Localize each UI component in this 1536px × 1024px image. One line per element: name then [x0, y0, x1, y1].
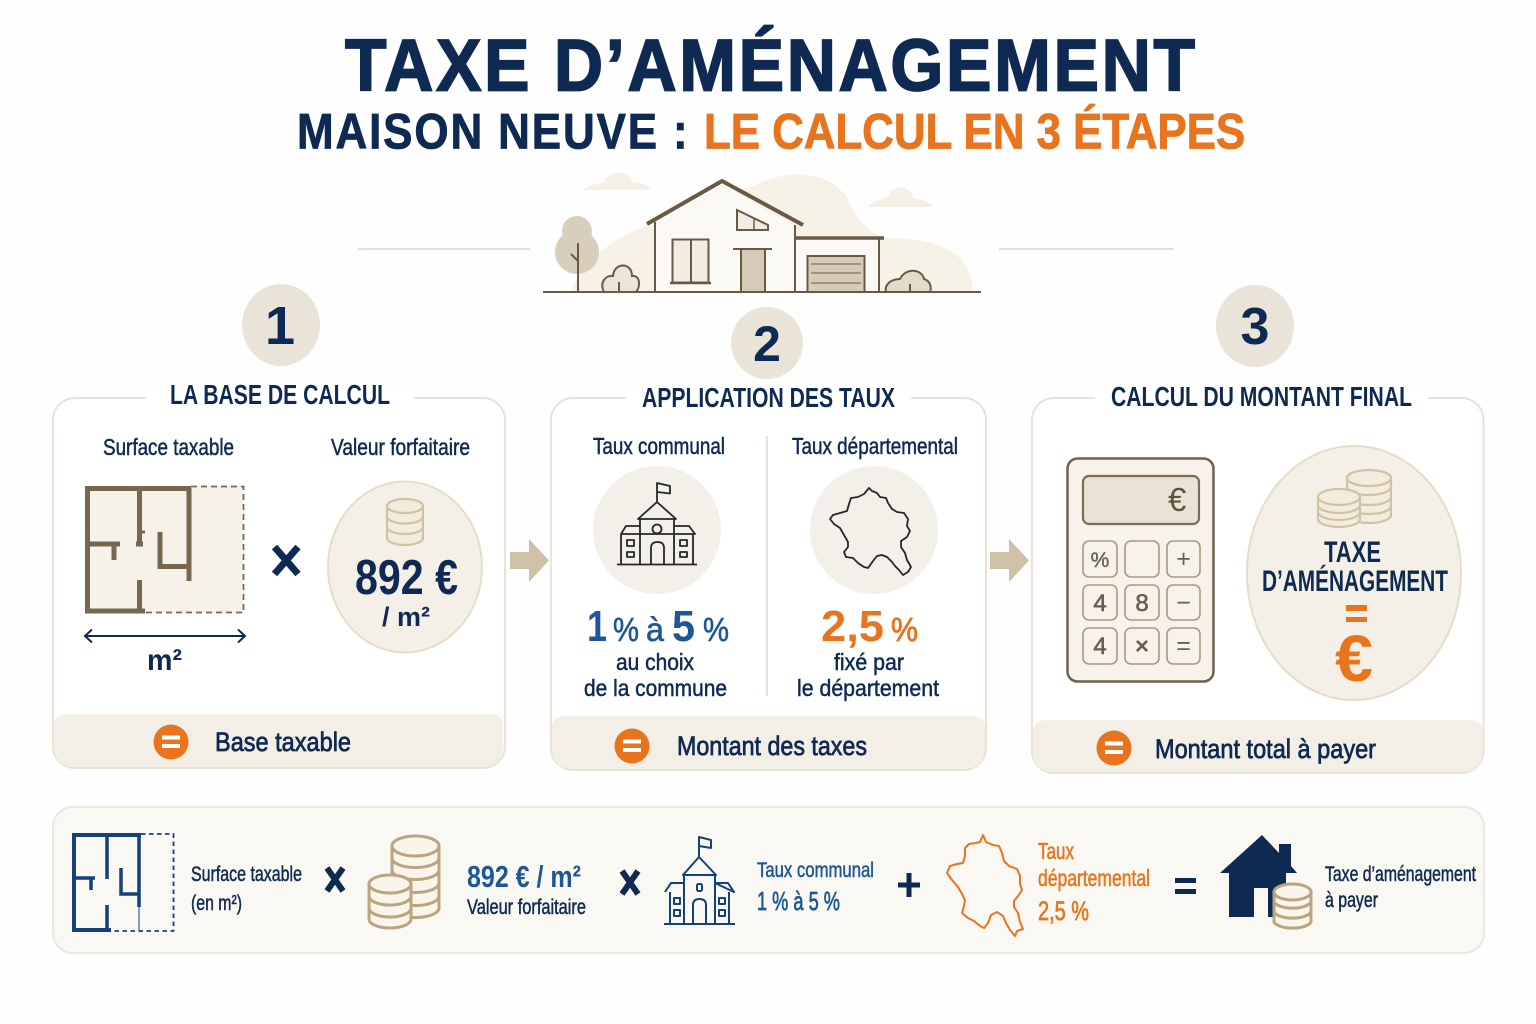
rate: 1 % à 5 %: à [646, 611, 665, 648]
icon: calculator: % [1091, 549, 1109, 572]
multiply sign [274, 547, 298, 574]
result circle: taxe d'aménagement = € [1247, 446, 1461, 700]
step 2 number badge: 2 [753, 316, 781, 372]
heading: APPLICATION DES TAUX [642, 382, 895, 413]
footer band: base taxable [54, 714, 503, 767]
step 3 number badge [1216, 285, 1294, 367]
value circle: 892 € / m²: / m² [382, 602, 430, 632]
panel: summary formula [53, 807, 1484, 953]
icon: floor plan [85, 486, 244, 613]
arrow: step 1 to step 2 [510, 539, 549, 582]
text: au choix de la commune [584, 649, 727, 701]
icon: calculator: × [1135, 633, 1149, 660]
icon: town hall [593, 466, 721, 594]
text: taux départemental 2,5 % [1038, 838, 1150, 926]
rate: 1 % à 5 %: 1 [587, 602, 607, 651]
arrow: step 2 to step 3 [990, 539, 1029, 582]
arrow: width dimension [85, 630, 245, 642]
subtitle [297, 103, 1245, 159]
multiply sign [327, 868, 343, 891]
rate: 1 % à 5 % [587, 602, 729, 651]
footer band: montant des taxes [552, 716, 985, 769]
text: fixé par le département: le département [797, 675, 940, 701]
text: 892 € / m² valeur forfaitaire [467, 859, 586, 919]
icon: floor plan blue [74, 834, 174, 931]
text: taux départemental 2,5 %: départemental [1038, 865, 1150, 891]
text: surface taxable en m²: (en m²) [191, 892, 242, 915]
icon: coin stacks [369, 836, 439, 928]
text: fixé par le département [797, 649, 940, 701]
label: m²: m² [147, 644, 182, 677]
rate: 2,5 %: % [891, 611, 918, 648]
result circle: taxe d'aménagement = €: TAXE [1324, 536, 1381, 569]
text: taux départemental 2,5 %: 2,5 % [1038, 896, 1089, 926]
footer band: base taxable: Base taxable [215, 727, 351, 757]
value circle: 892 € / m²: 892 € [355, 551, 458, 605]
label: taux départemental: Taux départemental [792, 433, 958, 459]
panel: step 2 application des taux [551, 382, 986, 770]
label: surface taxable: Surface taxable [103, 434, 234, 460]
result circle: taxe d'aménagement = €: € [1335, 621, 1373, 695]
icon: calculator: 8 [1135, 590, 1149, 617]
text: au choix de la commune: au choix [616, 649, 694, 675]
text: taux communal 1 % à 5 %: 1 % à 5 % [757, 886, 840, 916]
result circle: taxe d'aménagement = €: D’AMÉNAGEMENT [1262, 564, 1448, 598]
step 3 number badge: 3 [1241, 298, 1269, 356]
text: taux départemental 2,5 %: Taux [1038, 838, 1074, 864]
panel: step 3 calcul du montant final [1032, 381, 1484, 773]
multiply sign [622, 871, 638, 894]
heading: CALCUL DU MONTANT FINAL [1111, 381, 1412, 412]
icon: coin stack [387, 499, 423, 545]
heading: LA BASE DE CALCUL [170, 379, 390, 410]
label: taux communal: Taux communal [593, 433, 725, 459]
icon: house illustration [358, 172, 1174, 292]
text: surface taxable en m²: Surface taxable [191, 863, 302, 886]
text: taux communal 1 % à 5 % [757, 859, 874, 916]
icon: calculator: 4 [1093, 633, 1107, 660]
text: taxe d'aménagement à payer [1325, 863, 1476, 912]
footer band: montant total à payer: Montant total à payer [1155, 734, 1376, 764]
value circle: 892 € / m² [328, 482, 482, 652]
icon: calculator [1068, 458, 1214, 682]
text: taxe d'aménagement à payer: Taxe d’aménagement [1325, 863, 1476, 886]
text: surface taxable en m² [191, 863, 302, 915]
icon: department map orange [947, 835, 1023, 936]
rate: 2,5 % [821, 602, 918, 651]
rate: 1 % à 5 %: % [613, 611, 639, 648]
text: taux communal 1 % à 5 %: Taux communal [757, 859, 874, 882]
icon: department map [810, 466, 938, 594]
rate: 1 % à 5 %: % [703, 611, 729, 648]
subtitle: MAISON NEUVE : [297, 103, 688, 159]
icon: coins [1318, 470, 1391, 527]
title: TAXE D’AMÉNAGEMENT [345, 24, 1195, 106]
icon: calculator: € [1168, 481, 1186, 518]
rate: 1 % à 5 %: 5 [672, 602, 695, 651]
footer band: montant total à payer [1033, 720, 1482, 772]
text: taxe d'aménagement à payer: à payer [1325, 889, 1378, 912]
text: au choix de la commune: de la commune [584, 675, 727, 701]
step 1 number badge [242, 284, 320, 366]
icon: calculator: = [1176, 632, 1191, 660]
icon: calculator: + [1176, 545, 1191, 573]
icon: house with coins [1220, 835, 1311, 928]
rate: 2,5 %: 2,5 [821, 602, 884, 651]
plus sign [898, 873, 920, 897]
text: fixé par le département: fixé par [834, 649, 904, 675]
footer band: montant des taxes: Montant des taxes [677, 731, 867, 761]
icon: town hall blue [664, 837, 735, 924]
icon: calculator: 4 [1093, 590, 1107, 617]
equals sign [1175, 878, 1196, 894]
step 2 number badge [731, 307, 803, 379]
text: 892 € / m² valeur forfaitaire: 892 € / m² [467, 859, 581, 894]
label: valeur forfaitaire: Valeur forfaitaire [331, 434, 470, 460]
icon: calculator: − [1176, 589, 1191, 617]
panel: step 1 base de calcul [53, 379, 505, 768]
text: 892 € / m² valeur forfaitaire: Valeur forfaitaire [467, 896, 586, 919]
step 1 number badge: 1 [265, 296, 295, 356]
subtitle: LE CALCUL EN 3 ÉTAPES [704, 103, 1245, 159]
